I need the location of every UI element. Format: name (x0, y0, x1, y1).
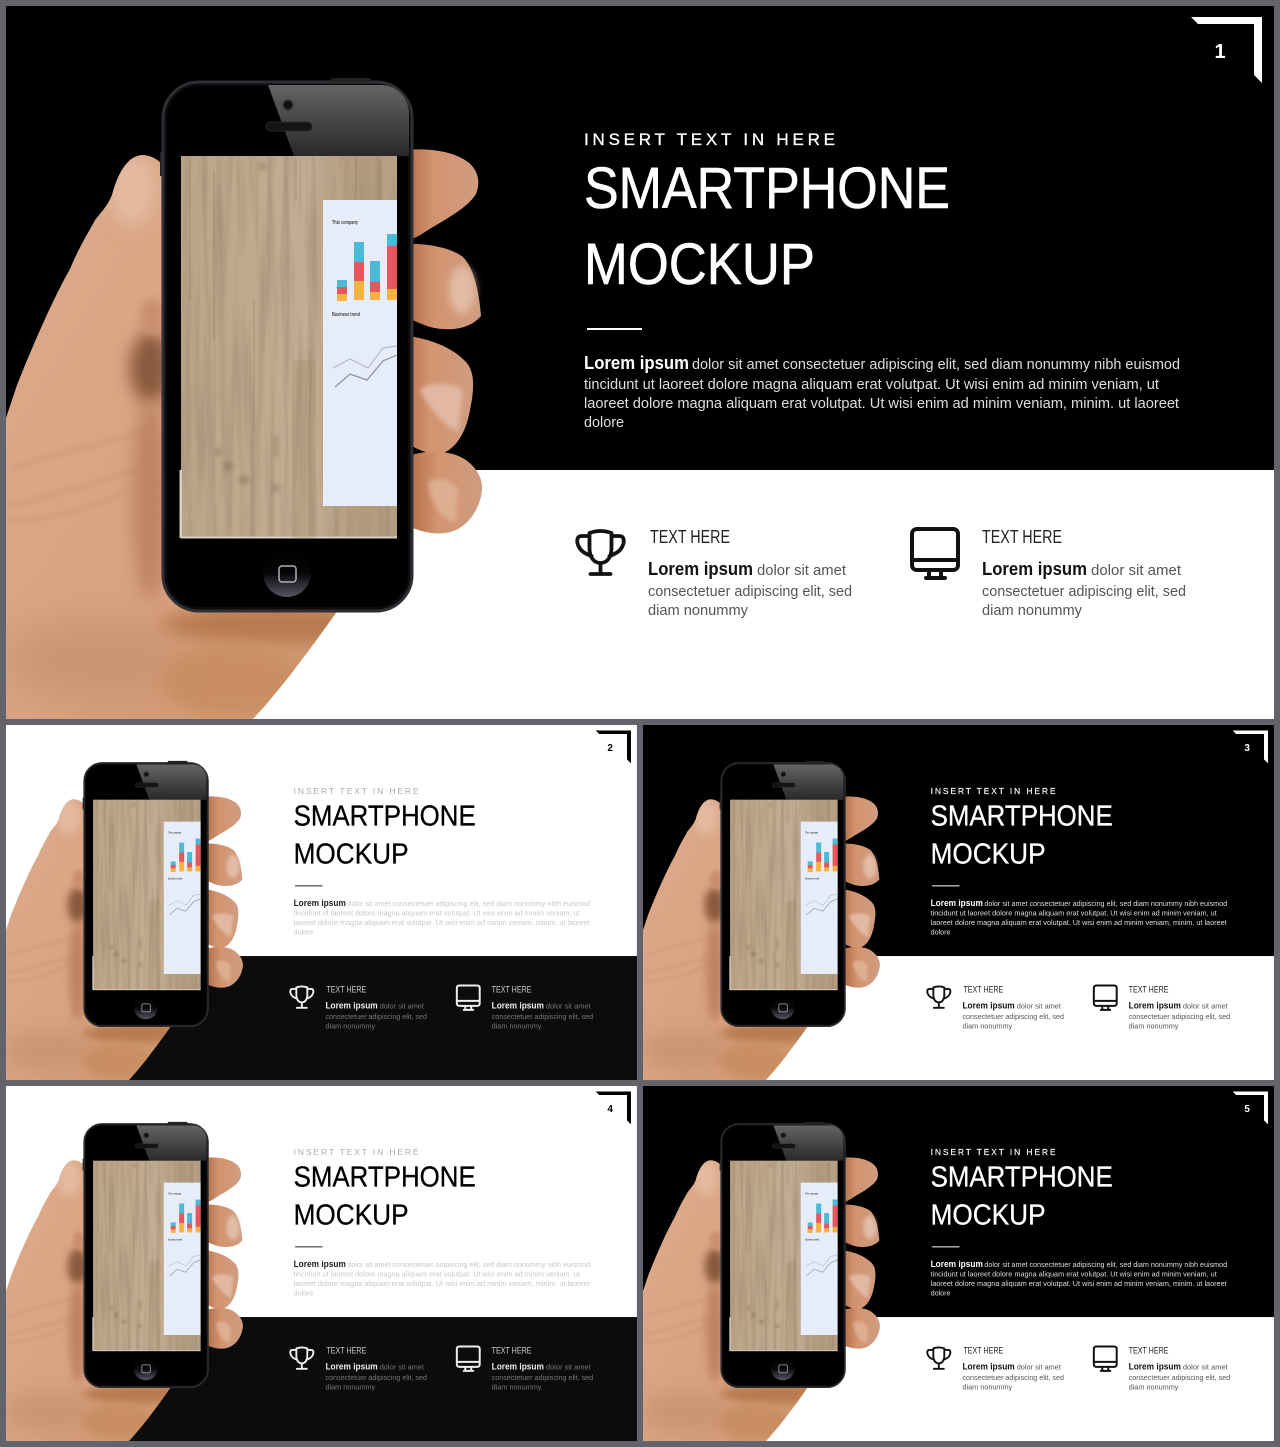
feature two text (492, 1345, 593, 1391)
feature one text: TEXT HERE (650, 527, 730, 547)
icon: monitor (912, 529, 958, 578)
eyebrow text: INSERT TEXT IN HERE (931, 786, 1056, 796)
feature one text (962, 1345, 1064, 1391)
body text (294, 1259, 591, 1298)
corner mark with slide number: 1 (1214, 41, 1226, 63)
feature two text: dolor sit amet (1183, 1362, 1228, 1371)
feature one text: consectetuer adipiscing elit, sed (962, 1373, 1064, 1382)
eyebrow text: INSERT TEXT IN HERE (931, 1147, 1056, 1157)
feature one text: dolor sit amet (380, 1362, 424, 1371)
eyebrow text: INSERT TEXT IN HERE (294, 786, 419, 796)
body text: Lorem ipsum (931, 1259, 983, 1269)
feature one text: Lorem ipsum (325, 1000, 378, 1010)
feature two text: Lorem ipsum (492, 1361, 544, 1371)
body text: dolor sit amet consectetuer adipiscing elit, sed diam nonummy nibh euismod (347, 1260, 590, 1269)
panel: slide 4 light (3, 1086, 637, 1441)
title line two: MOCKUP (584, 232, 815, 297)
body text: tincidunt ut laoreet dolore magna aliquam erat volutpat. Ut wisi enim ad minim veniam, ut (294, 1270, 581, 1279)
feature two text: consectetuer adipiscing elit, sed (1129, 1012, 1230, 1021)
panel: slide 2 light (3, 725, 637, 1080)
feature one text: dolor sit amet (1017, 1001, 1061, 1010)
body text: dolor sit amet consectetuer adipiscing elit, sed diam nonummy nibh euismod (984, 899, 1227, 908)
body text (931, 1259, 1228, 1298)
feature two text: diam nonummy (982, 603, 1083, 619)
panel: slide 3 dark (640, 725, 1274, 1080)
eyebrow text: INSERT TEXT IN HERE (294, 1147, 419, 1157)
title line two: MOCKUP (294, 838, 409, 870)
body text: dolore (294, 1289, 314, 1298)
feature one text: Lorem ipsum (962, 1361, 1015, 1371)
body text: dolore (931, 1289, 951, 1298)
feature one text: dolor sit amet (380, 1001, 424, 1010)
body text: laoreet dolore magna aliquam erat volutpat. Ut wisi enim ad minim veniam, minim. ut laoreet (294, 1279, 591, 1288)
body text: dolore (294, 928, 314, 937)
body text: dolor sit amet consectetuer adipiscing elit, sed diam nonummy nibh euismod (984, 1260, 1227, 1269)
feature two text: TEXT HERE (1129, 1345, 1168, 1355)
title line one: SMARTPHONE (294, 1162, 476, 1194)
body text: Lorem ipsum (294, 898, 346, 908)
feature two text (982, 527, 1186, 619)
feature two text: dolor sit amet (546, 1001, 591, 1010)
title line two: MOCKUP (294, 1199, 409, 1231)
image: hand holding smartphone (0, 78, 482, 719)
icon: monitor (457, 985, 480, 1010)
feature one text: consectetuer adipiscing elit, sed (648, 584, 852, 600)
icon: trophy (927, 986, 950, 1008)
feature one text (325, 1345, 427, 1391)
body text: laoreet dolore magna aliquam erat volutpat. Ut wisi enim ad minim veniam, minim. ut laoreet (931, 1279, 1228, 1288)
feature one text: consectetuer adipiscing elit, sed (325, 1373, 427, 1382)
body text: Lorem ipsum (584, 353, 689, 373)
body text (584, 353, 1180, 431)
image: hand holding smartphone (3, 761, 243, 1080)
image: hand holding smartphone (3, 1122, 243, 1441)
feature one text: TEXT HERE (963, 984, 1003, 994)
corner mark with slide number (1233, 1091, 1268, 1124)
short rule (932, 885, 960, 886)
short rule (587, 328, 642, 330)
icon: trophy (290, 1347, 313, 1369)
title line one: SMARTPHONE (294, 801, 476, 833)
corner mark with slide number: 5 (1244, 1104, 1250, 1115)
feature one text: TEXT HERE (326, 984, 366, 994)
body text: tincidunt ut laoreet dolore magna aliquam erat volutpat. Ut wisi enim ad minim veniam, ut (294, 909, 581, 918)
feature one text: diam nonummy (325, 1382, 376, 1391)
panel: slide 1 large dark (0, 6, 1274, 719)
title line two: MOCKUP (931, 838, 1046, 870)
feature two text: consectetuer adipiscing elit, sed (982, 584, 1186, 600)
feature two text: diam nonummy (1129, 1382, 1179, 1391)
image: hand holding smartphone (640, 1122, 880, 1441)
body text: dolor sit amet consectetuer adipiscing elit, sed diam nonummy nibh euismod (692, 356, 1180, 373)
icon: monitor (457, 1346, 480, 1371)
title line two: MOCKUP (931, 1199, 1046, 1231)
feature one text: TEXT HERE (326, 1345, 366, 1355)
feature one text: diam nonummy (962, 1382, 1013, 1391)
feature two text: dolor sit amet (1091, 563, 1181, 579)
feature one text: dolor sit amet (1017, 1362, 1061, 1371)
corner mark with slide number (1233, 730, 1268, 763)
feature two text (1129, 984, 1230, 1030)
body text: tincidunt ut laoreet dolore magna aliquam erat volutpat. Ut wisi enim ad minim veniam, ut (584, 376, 1160, 393)
feature two text: Lorem ipsum (492, 1000, 544, 1010)
title line one: SMARTPHONE (931, 801, 1113, 833)
feature two text: consectetuer adipiscing elit, sed (1129, 1373, 1230, 1382)
feature one text (325, 984, 427, 1030)
feature two text: diam nonummy (1129, 1021, 1179, 1030)
feature two text: consectetuer adipiscing elit, sed (492, 1012, 593, 1021)
corner mark with slide number (1191, 17, 1262, 83)
title line one: SMARTPHONE (931, 1162, 1113, 1194)
icon: trophy (290, 986, 313, 1008)
body text: laoreet dolore magna aliquam erat volutpat. Ut wisi enim ad minim veniam, minim. ut laoreet (931, 918, 1228, 927)
feature one text: dolor sit amet (757, 563, 846, 579)
panel: slide 5 dark (640, 1086, 1274, 1441)
feature two text: TEXT HERE (492, 1345, 531, 1355)
body text: tincidunt ut laoreet dolore magna aliquam erat volutpat. Ut wisi enim ad minim veniam, ut (931, 1270, 1218, 1279)
body text: tincidunt ut laoreet dolore magna aliquam erat volutpat. Ut wisi enim ad minim veniam, ut (931, 909, 1218, 918)
image: hand holding smartphone (640, 761, 880, 1080)
body text: laoreet dolore magna aliquam erat volutpat. Ut wisi enim ad minim veniam, minim. ut laoreet (584, 395, 1180, 412)
corner mark with slide number (596, 1091, 631, 1124)
feature two text: Lorem ipsum (982, 559, 1087, 579)
feature one text: Lorem ipsum (962, 1000, 1015, 1010)
body text: laoreet dolore magna aliquam erat volutpat. Ut wisi enim ad minim veniam, minim. ut laoreet (294, 918, 591, 927)
feature one text: diam nonummy (648, 603, 749, 619)
feature one text: consectetuer adipiscing elit, sed (325, 1012, 427, 1021)
body text: dolore (584, 414, 624, 431)
corner mark with slide number: 4 (607, 1104, 613, 1115)
feature one text: Lorem ipsum (648, 559, 753, 579)
body text: Lorem ipsum (294, 1259, 346, 1269)
icon: monitor (1094, 985, 1117, 1010)
feature two text: TEXT HERE (492, 984, 531, 994)
icon: trophy (927, 1347, 950, 1369)
short rule (932, 1245, 959, 1248)
title line one: SMARTPHONE (584, 156, 950, 221)
body text (930, 900, 1227, 934)
short rule (295, 885, 322, 886)
feature two text: TEXT HERE (982, 527, 1062, 547)
feature two text: diam nonummy (492, 1382, 542, 1391)
body text (294, 900, 590, 934)
feature one text: diam nonummy (962, 1021, 1013, 1030)
feature two text: diam nonummy (492, 1021, 542, 1030)
corner mark with slide number: 3 (1244, 743, 1250, 754)
feature two text: dolor sit amet (546, 1362, 591, 1371)
icon: monitor (1094, 1346, 1117, 1371)
feature one text (962, 984, 1064, 1030)
feature two text: Lorem ipsum (1129, 1000, 1181, 1010)
feature two text (492, 984, 593, 1030)
icon: trophy (577, 531, 624, 574)
feature two text (1129, 1345, 1230, 1391)
eyebrow text: INSERT TEXT IN HERE (584, 130, 835, 149)
feature one text: TEXT HERE (963, 1345, 1003, 1355)
feature two text: Lorem ipsum (1129, 1361, 1181, 1371)
corner mark with slide number (596, 730, 631, 763)
feature one text (648, 527, 852, 619)
corner mark with slide number: 2 (607, 743, 613, 754)
feature two text: dolor sit amet (1183, 1001, 1228, 1010)
feature two text: consectetuer adipiscing elit, sed (492, 1373, 593, 1382)
body text: Lorem ipsum (931, 898, 983, 908)
feature one text: Lorem ipsum (325, 1361, 378, 1371)
feature one text: consectetuer adipiscing elit, sed (962, 1012, 1064, 1021)
feature two text: TEXT HERE (1129, 984, 1168, 994)
body text: dolore (931, 928, 951, 937)
short rule (295, 1245, 322, 1248)
body text: dolor sit amet consectetuer adipiscing elit, sed diam nonummy nibh euismod (347, 899, 590, 908)
feature one text: diam nonummy (325, 1021, 376, 1030)
